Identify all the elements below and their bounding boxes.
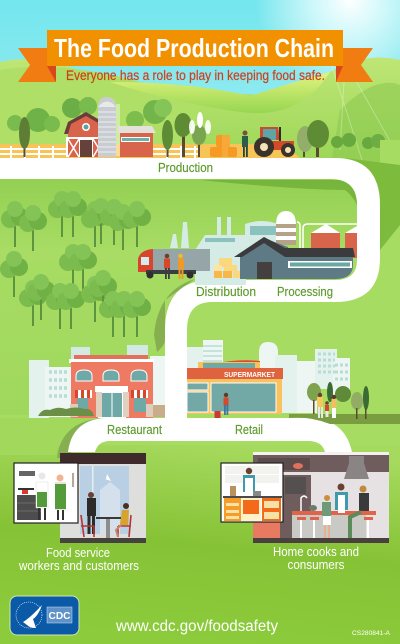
restaurant building xyxy=(74,355,148,360)
entrance xyxy=(95,386,129,418)
label: production: Production xyxy=(158,160,213,175)
park ground xyxy=(289,414,400,424)
tall trees xyxy=(19,113,329,157)
caption: food service workers: Food service xyxy=(46,545,110,560)
city scene: restaurant xyxy=(29,345,165,418)
supermarket sign: SUPERMARKET xyxy=(224,372,276,379)
truck driver xyxy=(164,254,170,279)
striped silo xyxy=(276,211,300,250)
CDC logo: CDC xyxy=(48,610,71,622)
pale city buildings xyxy=(187,340,350,413)
shopper with suitcase xyxy=(214,393,228,418)
ribbon tails xyxy=(18,48,56,82)
caption: food service workers: workers and customers xyxy=(18,558,139,573)
cardboard boxes xyxy=(214,258,240,278)
panel: food service dining room xyxy=(60,453,146,543)
child xyxy=(322,495,331,538)
farm scene: production xyxy=(0,97,393,158)
publication code: CS280841-A xyxy=(352,630,391,637)
city scene: supermarket xyxy=(187,340,400,424)
CDC logo xyxy=(10,596,79,635)
title: The Food Production Chain xyxy=(54,33,334,63)
farmer xyxy=(242,130,248,157)
background trees xyxy=(7,97,393,156)
park trees xyxy=(307,382,369,419)
factory scene: distribution and processing xyxy=(138,211,357,285)
family xyxy=(317,393,336,418)
striped awnings xyxy=(75,390,148,398)
label: retail: Retail xyxy=(235,422,263,437)
subtitle: Everyone has a role to play in keeping food safe. xyxy=(66,68,325,83)
forest trees xyxy=(0,191,151,337)
middle field background xyxy=(0,178,357,420)
lower field background xyxy=(0,445,400,644)
store windows xyxy=(187,383,276,412)
sun glow xyxy=(255,0,400,95)
shed xyxy=(118,126,156,157)
warehouse worker xyxy=(178,254,184,279)
hay bales xyxy=(210,135,237,157)
distant hills xyxy=(0,58,400,200)
label: distribution: Distribution xyxy=(196,284,256,299)
caption: home cooks: Home cooks and xyxy=(273,544,359,559)
seated consumer xyxy=(350,486,369,538)
arched windows xyxy=(76,370,147,381)
delivery truck xyxy=(138,249,210,278)
stage labels xyxy=(107,160,333,437)
sky background xyxy=(0,0,400,200)
right field xyxy=(0,140,400,445)
customer xyxy=(116,503,129,537)
red silos with pipe xyxy=(303,224,357,258)
hedges xyxy=(38,408,94,416)
label: restaurant: Restaurant xyxy=(107,422,162,437)
caption: home cooks xyxy=(273,544,359,572)
website url: www.cdc.gov/foodsafety xyxy=(115,618,278,635)
shop windows xyxy=(77,398,146,412)
caption: home cooks: consumers xyxy=(288,557,345,572)
counter stools xyxy=(297,517,373,538)
label: processing: Processing xyxy=(277,284,333,299)
ground strip xyxy=(0,144,300,158)
waiter xyxy=(87,492,96,534)
white fence xyxy=(0,146,199,158)
pale city buildings xyxy=(29,345,165,418)
dining table and chairs xyxy=(81,515,131,538)
inset: home stove xyxy=(221,463,283,522)
supermarket building xyxy=(198,360,260,368)
title banner xyxy=(18,30,373,83)
white winding road xyxy=(0,158,380,452)
barn xyxy=(64,112,108,157)
wheat xyxy=(189,112,211,134)
silo xyxy=(98,97,119,157)
road shadow xyxy=(154,279,195,352)
warehouse xyxy=(234,237,355,279)
caption: food service workers xyxy=(18,545,139,573)
panel: home kitchen xyxy=(253,452,389,543)
inset: restaurant kitchen xyxy=(14,463,78,523)
pale factory buildings xyxy=(170,217,278,285)
tractor xyxy=(254,127,295,157)
home cook xyxy=(335,484,348,513)
